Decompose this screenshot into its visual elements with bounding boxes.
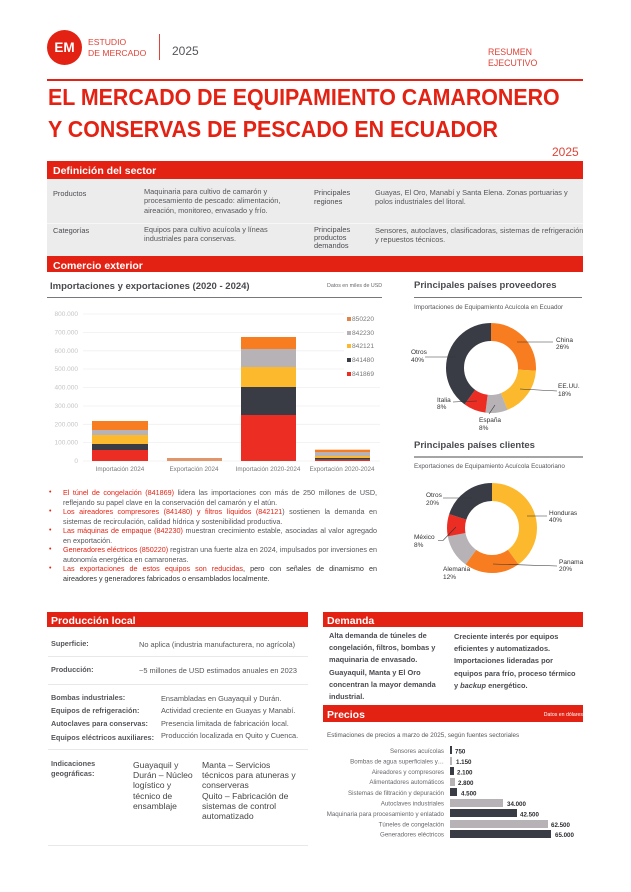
bar chart: precios: 34.000	[507, 801, 526, 808]
text: productos demandados: y repuestos técnicos.	[375, 235, 445, 244]
legend: 842230	[352, 330, 374, 337]
bar chart: importaciones y exportaciones: Exportación 2024	[169, 466, 219, 473]
donut chart: proveedores: 26%	[556, 344, 569, 351]
bar chart: precios: Sistemas de filtración y depuración	[348, 790, 445, 797]
value: autoclaves: Presencia limitada de fabricación local.	[161, 719, 289, 728]
row: autoclaves: Autoclaves para conservas:	[51, 719, 148, 728]
bar chart: precios: Autoclaves industriales	[381, 800, 444, 808]
geo column 1: logístico y	[133, 780, 171, 790]
heading: producción local: Producción local	[51, 615, 136, 627]
value: producción: ~5 millones de USD estimados anuales en 2023	[139, 666, 297, 675]
value: refrigeración: Actividad creciente en Guayas y Manabí.	[161, 706, 295, 715]
legend: 850220	[352, 316, 374, 323]
bar: importación 2020-2024	[241, 337, 296, 461]
demand text left: maquinaria de envasado.	[329, 655, 417, 664]
geo column 1: Guayaquil y	[133, 760, 178, 770]
insight 5: aireadores y generadores fabricados o ensamblados localmente.	[63, 574, 270, 583]
report type: EJECUTIVO	[488, 58, 537, 68]
demand text right: eficientes y automatizados.	[454, 644, 550, 653]
donut chart: proveedores	[411, 323, 580, 432]
bar chart: importaciones y exportaciones: Importación 2020-2024	[236, 466, 301, 473]
donut chart: proveedores: 18%	[558, 391, 571, 398]
geo column 1	[133, 760, 193, 811]
panel: producción local	[47, 612, 308, 846]
label: principales productos: Principales	[314, 225, 350, 234]
legend: 842121	[352, 343, 374, 350]
demand text right: Creciente interés por equipos	[454, 632, 558, 641]
report type	[488, 47, 537, 68]
bar chart: precios: 1.150	[456, 759, 472, 766]
demand text left: Guayaquil, Manta y El Oro	[329, 668, 421, 677]
bar chart: precios: 65.000	[555, 832, 574, 839]
text: categorías	[144, 225, 268, 243]
insight 5	[63, 564, 377, 583]
donut chart: proveedores: 8%	[437, 404, 447, 411]
geo column 2: técnicos para atuneras y	[202, 770, 296, 780]
text: productos: procesamiento de pescado: alimentación,	[144, 196, 280, 205]
geo column 1: Durán – Núcleo	[133, 770, 193, 780]
subtitle: precios: Estimaciones de precios a marzo de 2025, según fuentes sectoriales	[327, 732, 519, 739]
text block: insights: •	[49, 527, 51, 534]
heading: demanda	[323, 612, 583, 627]
heading: principales países clientes: Principales países clientes	[414, 440, 535, 451]
geo column 2: Quito – Fabricación de	[202, 791, 288, 801]
demand text left: industrial.	[329, 692, 364, 701]
text: regiones: Guayas, El Oro, Manabí y Santa Elena. Zonas portuarias y	[375, 188, 568, 197]
row: equipos de refrigeración: Equipos de refrigeración:	[51, 706, 139, 715]
bar: exportación 2020-2024	[315, 450, 370, 461]
title: EL MERCADO DE EQUIPAMIENTO CAMARONERO	[48, 84, 560, 110]
donut chart: proveedores: Italia	[437, 397, 451, 404]
legend: 841869	[352, 371, 374, 378]
bar chart: importaciones y exportaciones: 100.000	[54, 440, 78, 447]
geo column 2: Manta – Servicios	[202, 760, 270, 770]
bar chart: importaciones y exportaciones: 200.000	[54, 421, 78, 428]
heading: importaciones y exportaciones: Importaciones y exportaciones (2020 - 2024)	[50, 281, 250, 292]
bar chart: precios: Túneles de congelación	[379, 822, 445, 828]
text block: insights: •	[49, 508, 51, 515]
logo year: 2025	[172, 44, 199, 58]
label: productos: Productos	[53, 189, 86, 198]
donut chart: clientes: 40%	[549, 517, 562, 524]
value: superficie: No aplica (industria manufacturera, no agrícola)	[139, 640, 295, 649]
title: Y CONSERVAS DE PESCADO EN ECUADOR	[48, 116, 498, 142]
text block: insights	[49, 488, 377, 583]
row: superficie: Superficie:	[51, 639, 89, 648]
bar chart: precios	[327, 746, 574, 839]
bar chart: importaciones y exportaciones: 600.000	[54, 348, 78, 355]
heading: demanda: Demanda	[327, 615, 374, 627]
donut chart: proveedores: 40%	[411, 357, 424, 364]
bar chart: precios: 4.500	[461, 790, 477, 798]
bar chart: importaciones y exportaciones: 800.000	[54, 311, 78, 318]
value: bombas: Ensambladas en Guayaquil y Durán.	[161, 694, 281, 703]
donut chart: clientes: Otros	[426, 492, 443, 499]
insight 4: Generadores eléctricos (850220) registran una fuerte alza en 2024, impulsados por inversiones en autonomía energética en camaroneras.	[63, 545, 377, 564]
donut chart: clientes: 12%	[443, 574, 456, 581]
insight 1: El túnel de congelación (841869) lidera las importaciones con más de 250 millones de USD, reflejando su papel clave en la conservación del camarón y el atún.	[63, 488, 377, 507]
demand text left: concentran la mayor demanda	[329, 680, 436, 689]
bar chart: precios: 2.100	[457, 770, 473, 776]
label: categorías: Categorías	[53, 226, 89, 235]
geo column 2: automatizado	[202, 811, 254, 821]
bar chart: importaciones y exportaciones: Exportación 2020-2024	[309, 466, 375, 473]
text: productos: aireación, monitoreo, envasado y frío.	[144, 206, 268, 215]
demand text right: Importaciones lideradas por	[454, 656, 553, 665]
bar: importación 2024	[92, 421, 148, 461]
heading: definición	[47, 161, 583, 179]
bar chart: importaciones y exportaciones: 700.000	[54, 329, 78, 336]
label: principales productos	[314, 225, 350, 250]
insight 5: Las exportaciones de estos equipos son reducidas, pero con señales de dinamismo en	[63, 564, 377, 573]
donut chart: clientes	[414, 483, 584, 581]
demand text left: Alta demanda de túneles de	[329, 631, 427, 640]
text: productos	[144, 187, 280, 215]
value: eléctricos: Producción localizada en Quito y Cuenca.	[161, 731, 298, 740]
text: categorías: industriales para conservas.	[144, 234, 236, 243]
panel: definición del sector	[47, 161, 583, 256]
row: indicaciones geográficas: geográficas:	[51, 768, 94, 778]
text block: insights: •	[49, 565, 51, 572]
label: principales productos: demandos	[314, 241, 349, 250]
label: principales regiones: regiones	[314, 197, 342, 206]
legend: 841480	[352, 357, 374, 364]
heading: definición: Definición del sector	[53, 165, 156, 177]
bar chart: importaciones y exportaciones	[54, 311, 380, 473]
text block: insights: •	[49, 546, 51, 553]
geo column 1: ensamblaje	[133, 801, 177, 811]
donut chart: proveedores: EE.UU.	[558, 383, 580, 390]
heading: precios: Precios	[327, 709, 365, 721]
text: productos demandados	[375, 226, 583, 244]
bar: exportación 2024	[167, 458, 222, 461]
note: currency: Datos en dólares	[544, 712, 583, 718]
panel: precios	[323, 705, 583, 839]
geo column 2: conserveras	[202, 780, 249, 790]
text: productos demandados: Sensores, autoclaves, clasificadoras, sistemas de refrigeración	[375, 226, 583, 235]
row: equipos eléctricos: Equipos eléctricos auxiliares:	[51, 733, 154, 742]
row: indicaciones geográficas: Indicaciones	[51, 759, 95, 768]
demand text left	[329, 631, 436, 701]
text: regiones: polos industriales del litoral.	[375, 197, 466, 206]
text block: insights: •	[49, 489, 51, 496]
title	[48, 84, 560, 142]
label: principales regiones	[314, 188, 350, 206]
bar chart: precios: Generadores eléctricos	[380, 832, 444, 838]
report type: RESUMEN	[488, 47, 532, 57]
heading: precios	[323, 705, 583, 722]
donut chart: proveedores: China	[556, 337, 573, 344]
donut chart: proveedores: Otros	[411, 349, 428, 356]
donut chart: proveedores: España	[479, 417, 501, 424]
icon: EM circle: EM	[54, 40, 75, 55]
bar chart: importaciones y exportaciones: 400.000	[54, 384, 78, 392]
heading: principales países proveedores: Principales países proveedores	[414, 280, 557, 291]
row: producción: Producción:	[51, 665, 94, 674]
bar chart: precios: Bombas de agua superficiales y…	[350, 758, 444, 766]
donut chart: clientes: 20%	[559, 566, 572, 573]
donut chart: clientes: Honduras	[549, 510, 578, 517]
bar chart: importaciones y exportaciones: Importación 2024	[96, 466, 145, 473]
bar chart: precios: 2.800	[458, 780, 474, 787]
subtitle: clientes: Exportaciones de Equipamiento Acuícola Ecuatoriano	[414, 463, 565, 470]
geo column 1: técnico de	[133, 791, 172, 801]
bar chart: precios: Sensores acuícolas	[390, 748, 444, 755]
demand text left: congelación, filtros, bombas y	[329, 643, 435, 652]
bar chart: importaciones y exportaciones: 300.000	[54, 403, 78, 410]
donut chart: clientes: 8%	[414, 542, 424, 549]
logo wordmark: DE MERCADO	[88, 48, 146, 58]
donut chart: clientes: México	[414, 534, 435, 541]
text: productos: Maquinaria para cultivo de camarón y	[144, 187, 267, 196]
panel: demanda	[323, 612, 583, 701]
bar chart: precios: Alimentadores automáticos	[369, 779, 444, 786]
insight 2: Los aireadores compresores (841480) y filtros líquidos (842121) sostienen la demanda en sistemas de recirculación, calidad hídrica y sostenibilidad productiva.	[63, 507, 377, 526]
text: regiones	[375, 188, 568, 206]
bar chart: precios: Maquinaria para procesamiento y enlatado	[327, 811, 445, 818]
label: principales regiones: Principales	[314, 188, 350, 197]
subtitle: proveedores: Importaciones de Equipamiento Acuícola en Ecuador	[414, 304, 563, 311]
demand text right	[454, 632, 576, 690]
note: units: Datos en miles de USD	[327, 283, 382, 289]
label: principales productos: productos	[314, 233, 346, 242]
heading: comercio exterior	[47, 256, 583, 272]
bar chart: precios: Aireadores y compresores	[372, 769, 444, 776]
legend	[344, 310, 380, 382]
demand text right: y backup energético.	[454, 681, 528, 690]
bar chart: precios: 42.500	[520, 812, 539, 818]
bar chart: precios: 62.500	[551, 822, 570, 829]
bar chart: precios: 750	[455, 748, 466, 756]
heading: producción local	[47, 612, 308, 627]
demand text right: equipos para frío, proceso térmico	[454, 669, 576, 678]
donut chart: proveedores: 8%	[479, 425, 489, 432]
header logo	[47, 30, 199, 65]
logo wordmark: ESTUDIO	[88, 37, 126, 47]
row: bombas industriales: Bombas industriales:	[51, 693, 125, 702]
heading: comercio exterior: Comercio exterior	[53, 260, 143, 272]
donut chart: clientes: Panama	[559, 559, 584, 566]
donut chart: clientes: 20%	[426, 500, 439, 507]
insight 3: Las máquinas de empaque (842230) muestran crecimiento estable, asociadas al valor agregado en exportación.	[63, 526, 377, 545]
geo column 2	[202, 760, 296, 821]
geo column 2: sistemas de control	[202, 801, 276, 811]
logo wordmark	[88, 37, 146, 58]
text: categorías: Equipos para cultivo acuícola y líneas	[144, 225, 268, 234]
title year: 2025	[552, 145, 579, 159]
icon: EM circle	[47, 30, 82, 65]
bar chart: importaciones y exportaciones: 500.000	[54, 366, 78, 373]
donut chart: clientes: Alemania	[443, 566, 470, 573]
row: indicaciones geográficas	[51, 759, 95, 778]
bar chart: importaciones y exportaciones: 0	[74, 458, 78, 465]
